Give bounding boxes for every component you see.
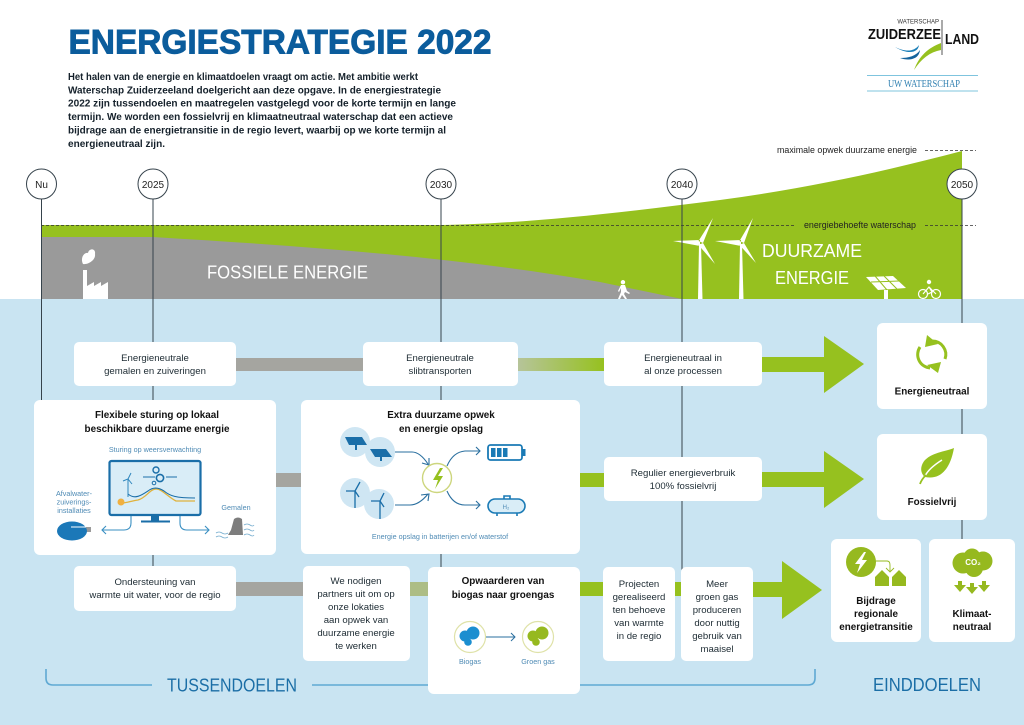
panel: biogas: biogas naar groengas (452, 590, 555, 601)
panel: extra duurzame opwek (301, 400, 580, 554)
icon: solar panel (866, 276, 906, 299)
marker: 2040 (667, 169, 697, 199)
icon: factory (82, 249, 108, 299)
card: groen gas maaisel: maaisel (700, 644, 734, 655)
card: groen gas maaisel: door nuttig (694, 618, 740, 629)
marker: 2040: 2040 (671, 180, 694, 191)
row 1 flow bars (236, 358, 604, 371)
icon: bolt and houses (846, 547, 906, 586)
goal: energieneutraal: Energieneutraal (895, 386, 970, 398)
card: partners: partners uit om op (317, 589, 395, 600)
intro text: energieneutraal zijn. (68, 139, 165, 150)
energy area chart (41, 145, 976, 299)
card: projecten warmte (603, 567, 675, 661)
goal: energieneutraal (877, 323, 987, 409)
card: regulier energieverbruik (604, 457, 762, 501)
icon: recycle (918, 335, 946, 373)
label: afvalwater: installaties (57, 506, 91, 515)
label sustainable: DUURZAME (762, 240, 862, 261)
card: ondersteuning warmte: warmte uit water, voor de regio (88, 590, 221, 601)
timeline (26, 169, 977, 570)
card: groen gas maaisel: Meer (706, 579, 729, 590)
marker: 2050 (947, 169, 977, 199)
label: afvalwater: zuiverings- (57, 498, 92, 506)
card: groen gas maaisel: gebruik van (692, 631, 742, 642)
goal: klimaatneutraal (929, 539, 1015, 642)
panel: biogas: Groen gas (521, 657, 555, 666)
icon: pumping station (216, 518, 254, 538)
intro text: termijn. We worden een fossielvrij en klimaatneutraal waterschap dat een actieve (68, 112, 453, 123)
icon: monitor (110, 461, 200, 522)
logo: LAND (945, 31, 979, 48)
goal: regionale energietransitie: Bijdrage (856, 596, 896, 607)
card: alle processen: Energieneutraal in (644, 353, 722, 364)
icon: water treatment (57, 522, 91, 540)
panel: flexibele sturing: Flexibele sturing op lokaal (95, 410, 219, 421)
card: groen gas maaisel: produceren (693, 605, 741, 616)
label: gemalen: Gemalen (221, 503, 251, 512)
panel: biogas (428, 567, 580, 694)
water background (0, 299, 1024, 725)
icon: hydrogen tank: H₂ (503, 505, 510, 511)
marker: 2030 (426, 169, 456, 199)
arrow: row 1 (762, 336, 864, 393)
card: projecten warmte: gerealiseerd (613, 592, 665, 603)
icon: cyclist (918, 280, 940, 298)
panel: flexibele sturing: Sturing op weersverwachting (109, 445, 201, 454)
marker: 2050: 2050 (951, 180, 974, 191)
panel: biogas: Biogas (459, 657, 481, 666)
label: afvalwater: Afvalwater- (56, 489, 93, 498)
goal: regionale energietransitie: energietransitie (839, 622, 913, 633)
icon: wind circles (340, 478, 394, 519)
intro text: Het halen van de energie en klimaatdoelen vraagt om actie. Met ambitie werkt (68, 72, 419, 83)
card: projecten warmte: Projecten (619, 579, 659, 590)
arrows to energy hub (395, 447, 480, 509)
arrow: to pumping stations (180, 516, 209, 534)
caption: opslag: Energie opslag in batterijen en/of waterstof (372, 532, 508, 541)
card: groen gas maaisel: groen gas (696, 592, 739, 603)
maximum line label: maximale opwek duurzame energie (777, 145, 917, 155)
card: projecten warmte: van warmte (614, 618, 664, 629)
card: partners: aan opwek van (324, 615, 388, 626)
goal: regionale energietransitie: regionale (854, 609, 898, 620)
label: einddoelen: EINDDOELEN (873, 674, 981, 695)
label fossil: FOSSIELE ENERGIE (207, 262, 368, 282)
icon: battery (488, 445, 526, 460)
card: energieneutrale gemalen: gemalen en zuiveringen (104, 366, 206, 377)
icon: walker (618, 280, 630, 299)
intro text: Waterschap Zuiderzeeland doelgericht aan deze opgave. In de energiestrategie (68, 85, 441, 96)
card: slibtransporten: Energieneutrale (406, 353, 474, 364)
card: alle processen: al onze processen (644, 366, 722, 377)
card: ondersteuning warmte: Ondersteuning van (114, 577, 196, 588)
panel: flexibele sturing: beschikbare duurzame energie (85, 424, 230, 435)
panel: biogas: Opwaarderen van (462, 576, 544, 587)
marker: Nu (26, 169, 56, 199)
card: groen gas maaisel (681, 567, 753, 661)
icon: energy hub (422, 464, 452, 492)
bracket: tussendoelen: TUSSENDOELEN (167, 676, 297, 696)
goal: fossielvrij (877, 434, 987, 520)
marker: 2025: 2025 (142, 180, 165, 191)
icon: wind turbines (673, 218, 756, 299)
icon: green gas (522, 622, 554, 652)
logo: WATERSCHAP (897, 20, 939, 26)
marker: 2030: 2030 (430, 180, 453, 191)
card: ondersteuning warmte (74, 566, 236, 611)
arrow: to waste water (102, 516, 131, 534)
arrow: biogas to green gas (486, 633, 515, 641)
icon: CO2 cloud: CO₂ (965, 558, 981, 567)
arrow: row 3 (753, 561, 822, 619)
card: slibtransporten: slibtransporten (409, 366, 471, 377)
logo: UW WATERSCHAP (888, 79, 960, 90)
row 3 flow bars (236, 582, 681, 596)
label sustainable: ENERGIE (775, 267, 849, 288)
panel: extra duurzame opwek: en energie opslag (399, 424, 483, 435)
card: energieneutrale gemalen (74, 342, 236, 386)
intro text: 2022 zijn tussendoelen en maatregelen vastgelegd voor de korte termijn en lange (68, 99, 456, 110)
card: energieneutrale gemalen: Energieneutrale (121, 353, 189, 364)
icon: biogas (454, 622, 486, 652)
goal: klimaatneutraal: Klimaat- (953, 609, 991, 620)
card: partners: duurzame energie (317, 628, 395, 639)
logo (867, 20, 979, 92)
bracket: tussendoelen (46, 669, 815, 696)
card: partners: We nodigen (330, 576, 382, 587)
goal: regionale energietransitie (831, 539, 921, 642)
goal: klimaatneutraal: neutraal (953, 622, 991, 633)
marker: Nu: Nu (35, 180, 48, 191)
card: partners: te werken (335, 641, 377, 652)
card: regulier energieverbruik: 100% fossielvrij (650, 481, 716, 492)
intro text (68, 72, 456, 150)
icon: leaf (920, 448, 954, 484)
label: afvalwater (56, 489, 93, 515)
card: slibtransporten (363, 342, 518, 386)
arrow: row 2 (762, 451, 864, 508)
title: ENERGIESTRATEGIE 2022 (68, 24, 492, 62)
panel: flexibele sturing (34, 400, 276, 555)
row 2 flow bars (276, 473, 604, 487)
card: projecten warmte: in de regio (617, 631, 661, 642)
marker: 2025 (138, 169, 168, 199)
card: regulier energieverbruik: Regulier energieverbruik (631, 468, 735, 479)
icon: solar circles (340, 427, 395, 467)
sustainable energy area (41, 151, 962, 299)
icon: hydrogen tank (488, 496, 525, 516)
card: alle processen (604, 342, 762, 386)
intro text: bijdrage aan de energietransitie in de regio levert, waarbij op we korte termijn al (68, 125, 446, 136)
panel: extra duurzame opwek: Extra duurzame opwek (387, 410, 495, 421)
demand line label: energiebehoefte waterschap (804, 220, 916, 230)
label sustainable (762, 240, 862, 288)
card: partners: onze lokaties (328, 602, 384, 613)
fossil energy area (41, 237, 682, 299)
card: partners (303, 566, 410, 661)
goal: fossielvrij: Fossielvrij (908, 497, 957, 508)
card: projecten warmte: ten behoeve (613, 605, 665, 616)
logo: ZUIDERZEE (868, 26, 941, 43)
